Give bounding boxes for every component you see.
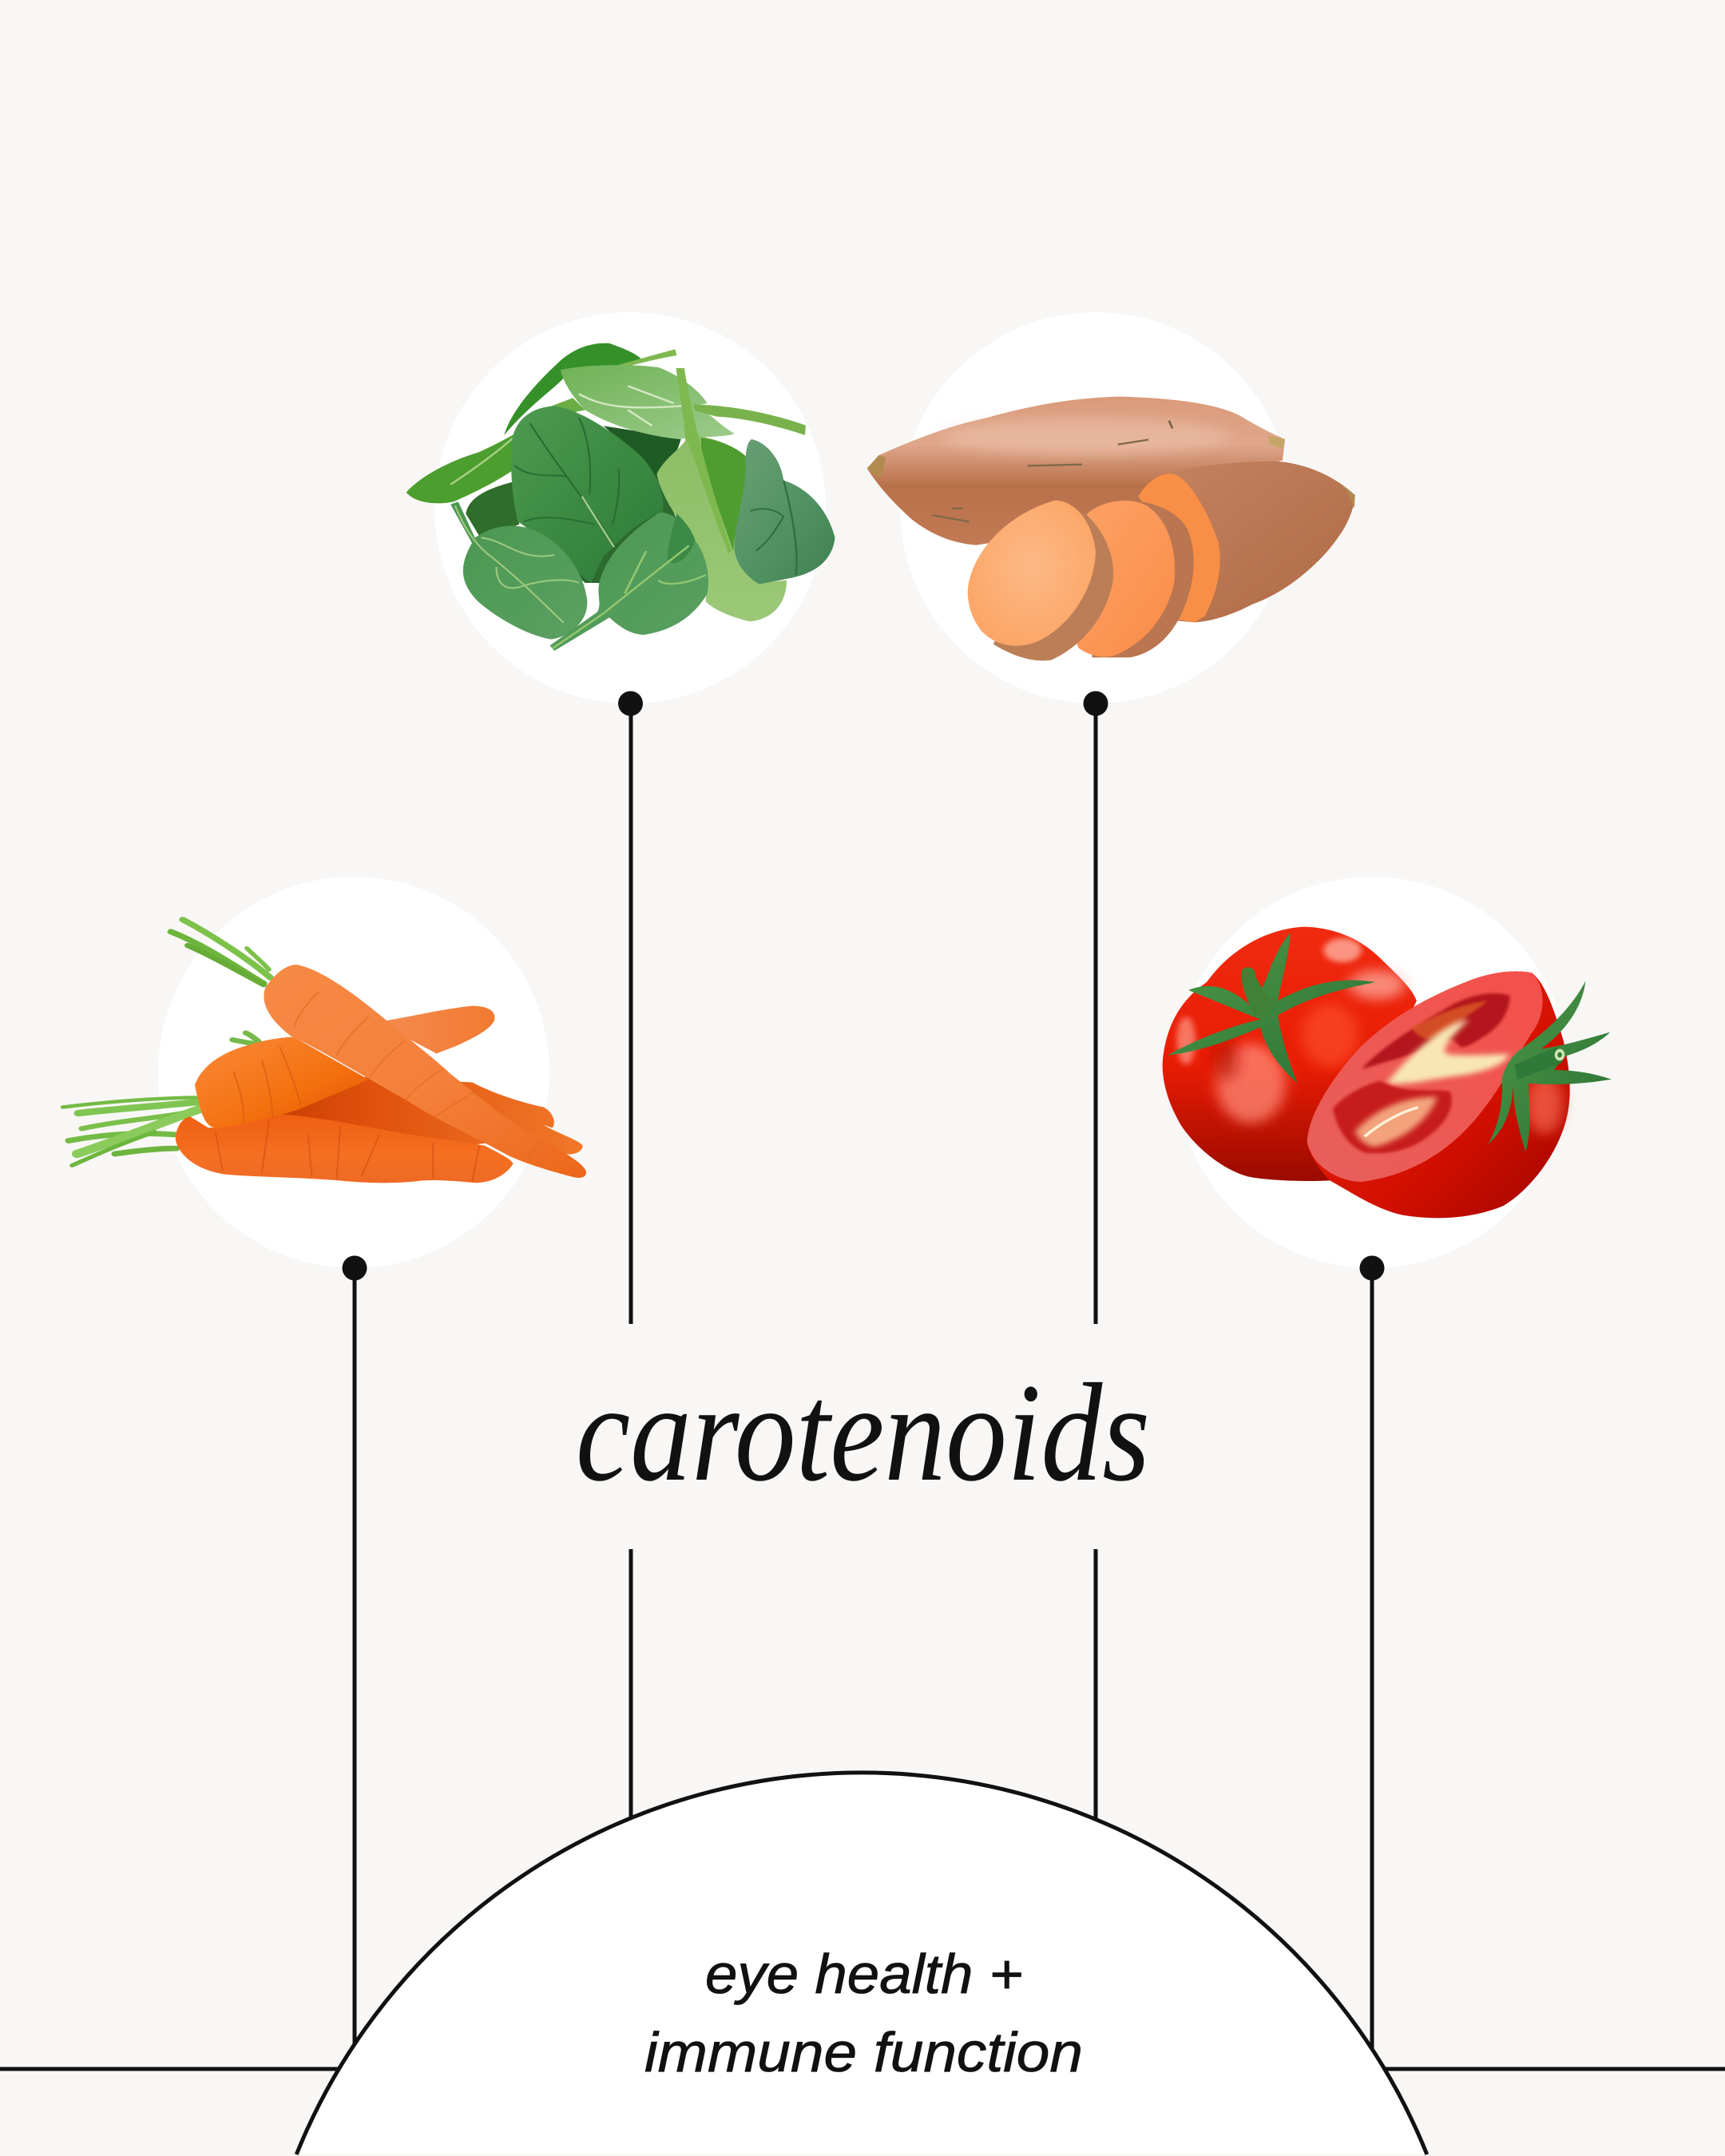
- icon: tomatoes: [1163, 926, 1612, 1219]
- benefit line 1: eye health +: [705, 1943, 1023, 2005]
- horizontal base line: [0, 2067, 1725, 2071]
- panel: spinach: [406, 312, 835, 715]
- panel: benefit dome: [296, 1773, 1427, 2154]
- connector: sweet potato lower: [1094, 1549, 1097, 1837]
- panel: carrots: [63, 877, 586, 1281]
- spinach backing circle: [434, 312, 826, 703]
- tomato dot: [1359, 1255, 1385, 1281]
- tomato backing circle: [1176, 877, 1568, 1268]
- carrot backing circle: [158, 877, 549, 1268]
- title: carotenoids: [576, 1355, 1150, 1511]
- connector: tomato: [1370, 1268, 1374, 2067]
- sweet potato dot: [1083, 692, 1108, 715]
- connector: spinach upper: [629, 703, 632, 1324]
- carrot dot: [342, 1255, 367, 1281]
- sweet potato backing circle: [900, 312, 1291, 703]
- dome arc: [296, 1773, 1427, 2154]
- spinach dot: [618, 692, 643, 715]
- benefit line 2: immune function: [644, 2021, 1083, 2083]
- icon: sweet potato: [867, 396, 1355, 661]
- connector: spinach lower: [629, 1549, 632, 1837]
- panel: sweet potato: [867, 312, 1355, 715]
- connector: sweet potato upper: [1094, 703, 1097, 1324]
- icon: spinach leaves: [406, 343, 835, 651]
- connector: carrot: [353, 1268, 356, 2067]
- icon: carrots: [61, 917, 586, 1183]
- panel: tomatoes: [1163, 877, 1612, 1281]
- benefit text: [644, 1943, 1083, 2083]
